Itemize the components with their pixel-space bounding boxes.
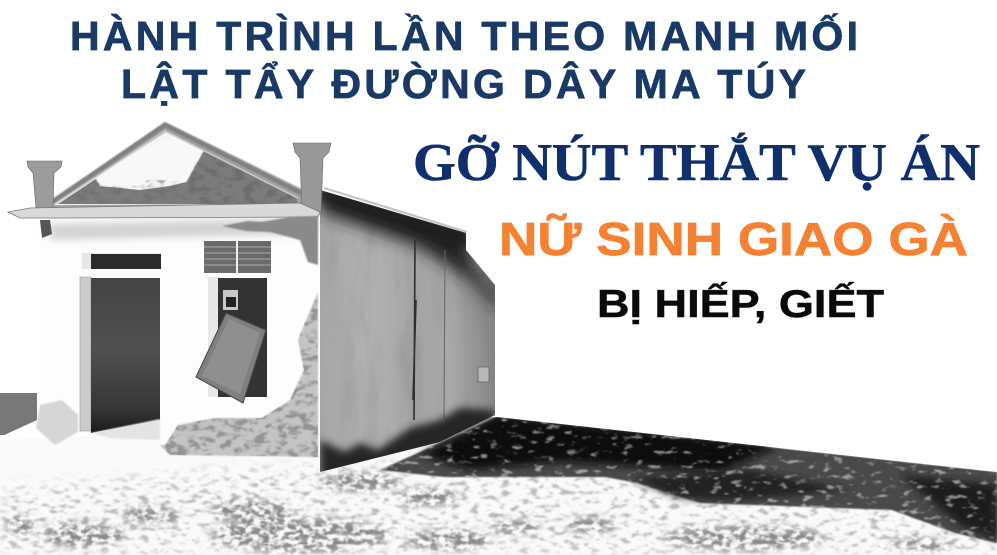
right post [293, 143, 331, 214]
headline: serif navy: GỠ NÚT THẮT VỤ ÁN [413, 132, 980, 192]
door frame [80, 277, 91, 431]
ground speckle [0, 458, 997, 555]
left post [27, 161, 62, 208]
pediment gable [42, 122, 308, 208]
ground shadow band behind the wall [380, 417, 997, 543]
rubble at lower left corner [36, 400, 78, 445]
front wall [38, 212, 318, 455]
ground darkest shadow [420, 415, 780, 472]
ground grey patches [2, 466, 954, 555]
door opening [91, 278, 160, 433]
door transom [82, 253, 161, 269]
cornice [8, 203, 320, 218]
side roof edge [324, 188, 467, 232]
exposed brick right edge [160, 292, 318, 457]
window [196, 277, 267, 403]
headline: black: BỊ HIẾP, GIẾT [597, 282, 884, 326]
side wall [320, 185, 500, 480]
wall top shadow [320, 185, 500, 310]
side wall joints [413, 240, 416, 420]
ground [0, 417, 997, 555]
low left fence [0, 393, 37, 435]
title [70, 13, 858, 107]
ground base [0, 417, 997, 555]
vent window [204, 241, 271, 273]
title line 1: HÀNH TRÌNH LẦN THEO MANH MỐI [70, 13, 858, 59]
headline: orange: NỮ SINH GIAO GÀ [499, 213, 968, 265]
ground band texture [380, 417, 997, 543]
title line 2: LẬT TẨY ĐƯỜNG DÂY MA TÚY [121, 60, 806, 107]
vent sign on side wall [478, 367, 489, 382]
fallen window shutter [196, 313, 266, 403]
plaster damage under cornice [222, 216, 318, 265]
house [0, 122, 500, 480]
wall base vegetation [320, 408, 495, 480]
